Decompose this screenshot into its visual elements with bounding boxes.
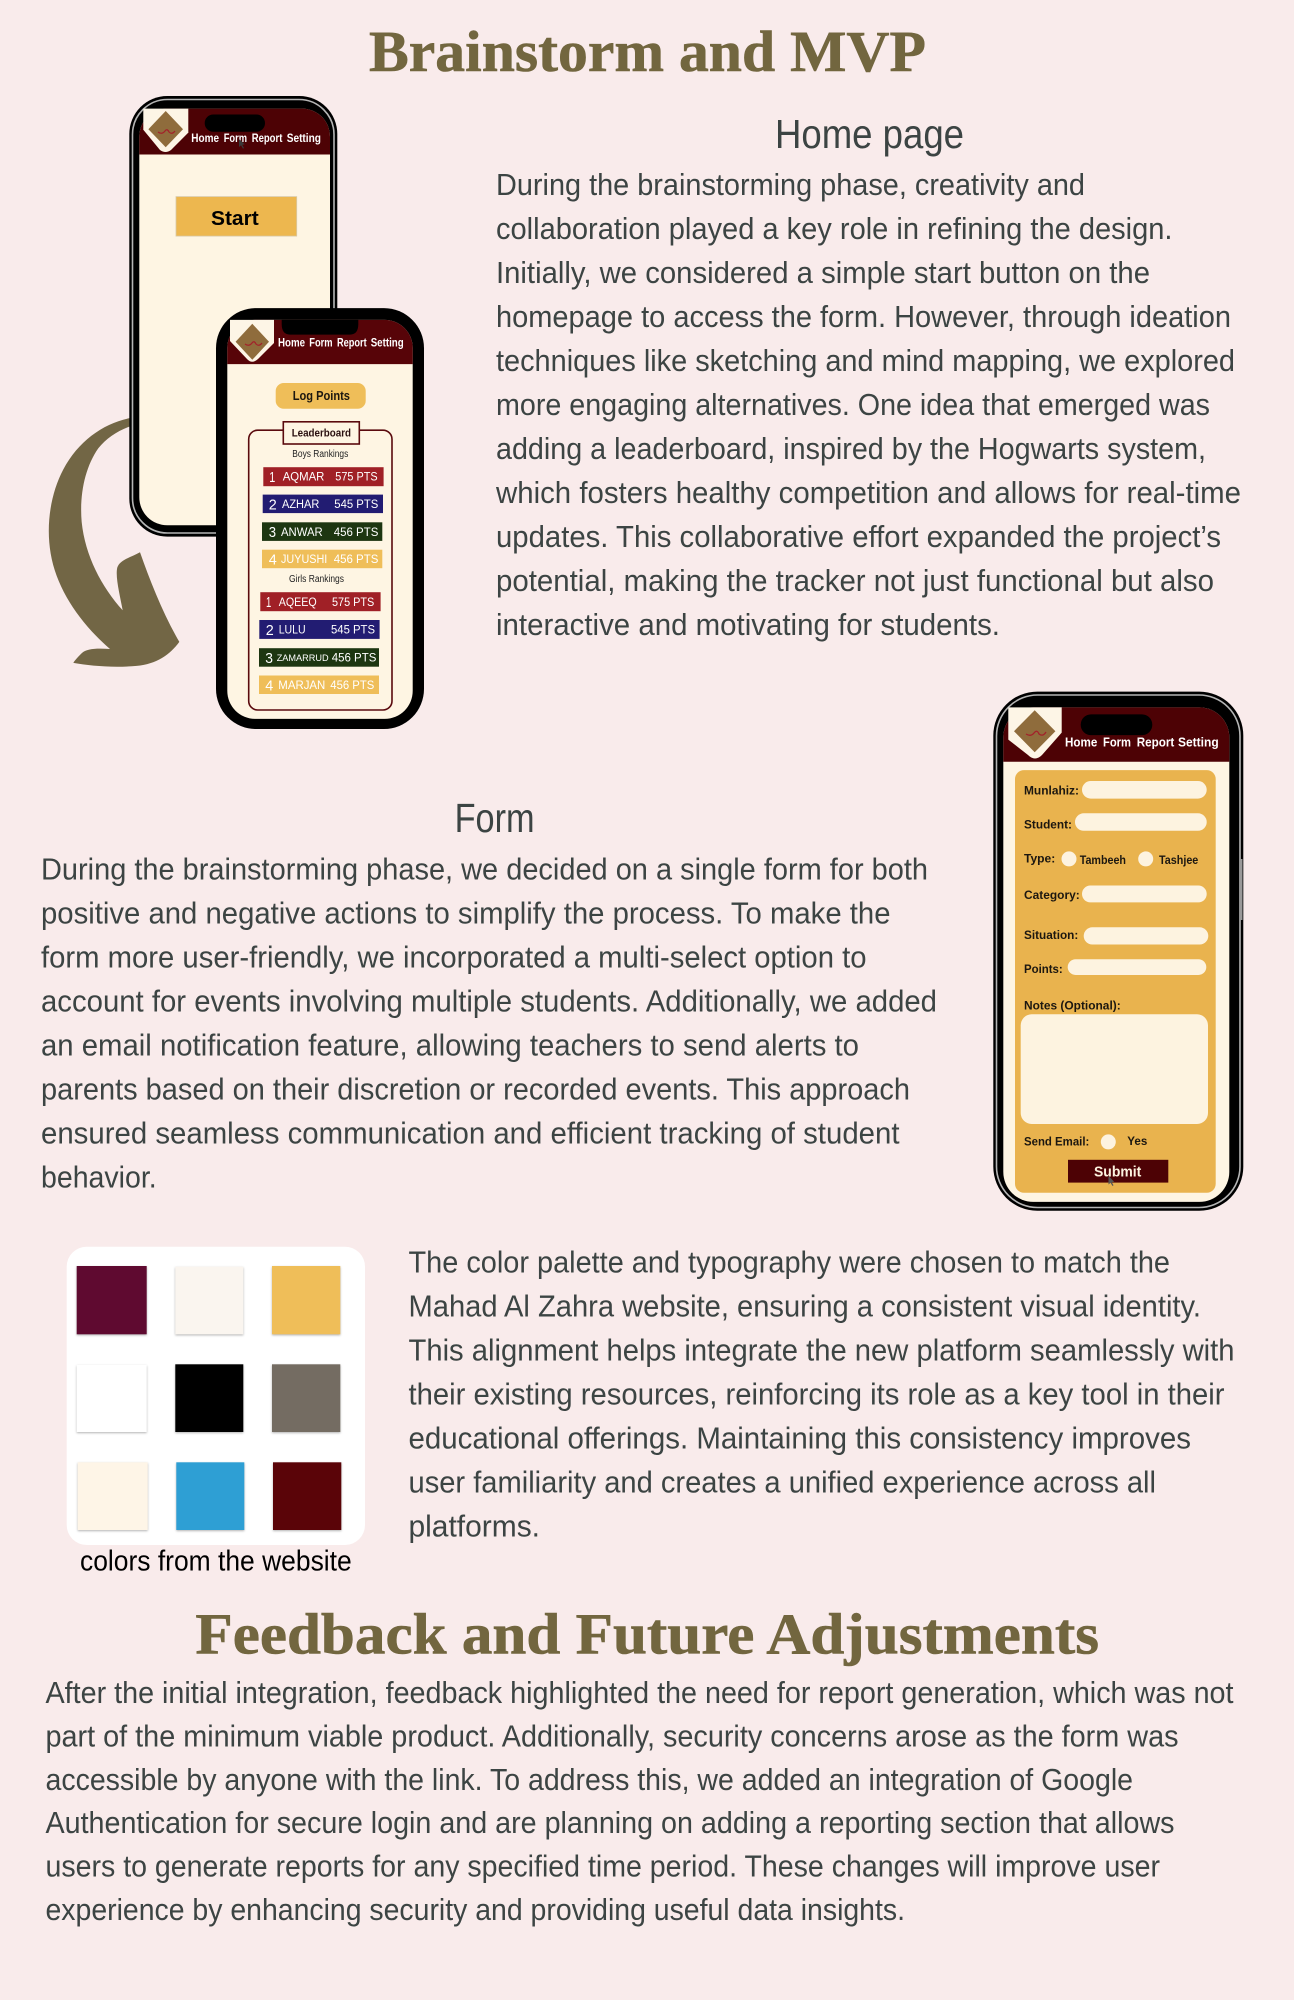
text block: palette description: platforms. [408,1508,540,1544]
girls rankings: 456 PTS [330,680,375,692]
boys rankings: 2 [269,496,277,513]
form labels: Category: [1024,888,1080,902]
girls rankings: 1 [266,594,271,611]
cursor [1108,1176,1114,1186]
notch [1081,714,1152,735]
navigation labels: Setting [1178,735,1219,750]
text block: form description: an email notification feature, allowing teachers to send alerts to [41,1028,859,1062]
navigation labels: Form [309,337,333,349]
text block: home page description [495,167,1241,642]
navigation labels: Setting [371,337,404,349]
navigation labels: Home [1065,735,1097,750]
color swatches [77,1266,341,1530]
phone header bar [1003,707,1229,762]
text block: feedback description: Authentication for secure login and are planning on adding a reporting section that allows [46,1805,1174,1840]
submit button [1068,1160,1168,1183]
boys rankings: 575 PTS [335,472,378,484]
logo [1008,707,1062,758]
form labels: Type: [1024,851,1055,865]
text block: home page description: During the brainstorming phase, creativity and [496,167,1085,202]
phone: home page with start button [129,96,337,537]
phone screen background [227,320,413,719]
boys rankings: 456 PTS [334,554,379,566]
girls rankings: AQEEQ [279,597,317,609]
phone screen background [1003,707,1229,1202]
boys rankings: 4 [269,551,277,568]
girls rankings: ZAMARRUD [277,653,329,664]
girls rankings: Girls Rankings [289,574,344,585]
text block: home page description: adding a leaderboard, inspired by the Hogwarts system, [496,431,1206,466]
form fields [1021,781,1208,1149]
title: Feedback and Future Adjustments: Feedback and Future Adjustments [195,1601,1099,1666]
girls rankings: 545 PTS [331,625,375,637]
boys rankings: AZHAR [282,499,319,511]
text block: feedback description: After the initial integration, feedback highlighted the need for report generation, which was not [46,1675,1234,1710]
girls rankings: 2 [266,622,274,639]
form labels: Tambeeh [1080,855,1126,867]
boys rankings: 545 PTS [334,499,379,511]
text block: form description [41,852,937,1194]
logo [143,109,188,152]
log points button: Log Points [293,388,350,403]
girls rankings: 456 PTS [332,653,377,665]
phone: form screen [993,692,1243,1211]
start button: Start [211,207,259,230]
navigation labels [191,133,321,145]
text block: form description: ensured seamless communication and efficient tracking of student [41,1116,900,1150]
caption: colors from the website: colors from the website [80,1546,352,1578]
notch [282,320,358,335]
text block: form description: positive and negative actions to simplify the process. To make the [41,896,890,930]
girls rankings: 4 [265,677,273,694]
form labels: Tashjee [1159,855,1198,867]
form labels: Send Email: [1024,1134,1089,1148]
form labels: Points: [1024,962,1063,976]
text block: palette description: Mahad Al Zahra website, ensuring a consistent visual identity. [408,1288,1201,1324]
phone header bar [139,109,330,154]
notch [205,114,265,132]
boys rankings: 456 PTS [334,527,379,539]
navigation labels: Setting [287,133,321,145]
text block: feedback description: users to generate reports for any specified time period. These changes will improve user [46,1849,1160,1884]
heading: Home page: Home page [775,111,964,157]
text block: palette description: educational offerings. Maintaining this consistency improves [408,1420,1191,1456]
navigation labels: Report [337,337,367,349]
panel: color palette [67,1247,365,1545]
cursor [239,139,245,149]
navigation labels: Report [1137,735,1175,750]
heading: Form: Form [455,795,535,841]
title: Brainstorm and MVP: Brainstorm and MVP [369,19,926,84]
boys rankings: JUYUSHI [281,554,327,566]
boys rankings: AQMAR [283,472,324,484]
navigation labels: Home [278,337,305,349]
leaderboard title: Leaderboard [292,428,351,440]
text block: home page description: potential, making the tracker not just functional but also [496,563,1214,598]
boys rankings: 3 [269,524,276,541]
text block: home page description: updates. This collaborative effort expanded the project’s [496,519,1221,554]
girls rankings [259,574,381,694]
navigation labels [278,337,404,349]
phone header bar [227,320,413,364]
arrow: curved arrow from home phone to leaderboard phone [49,417,179,667]
text block: feedback description: part of the minimum viable product. Additionally, security concerns arose as the form was [46,1718,1178,1753]
text block: feedback description: experience by enhancing security and providing useful data insights. [46,1892,905,1927]
text block: form description: behavior. [41,1160,157,1194]
leaderboard title [283,422,359,444]
leaderboard panel [249,422,392,710]
text block: home page description: Initially, we considered a simple start button on the [496,255,1150,290]
boys rankings [262,449,384,568]
navigation labels [1065,735,1219,750]
log points button [276,383,366,409]
text block: form description: parents based on their discretion or recorded events. This approach [41,1072,910,1106]
phone: home page with leaderboard [216,308,424,729]
text block: home page description: techniques like sketching and mind mapping, we explored [496,343,1235,378]
submit button: Submit [1094,1164,1141,1181]
navigation labels: Form [224,133,247,145]
text block: home page description: which fosters healthy competition and allows for real-time [495,475,1241,510]
form labels [1024,784,1198,1148]
text block: palette description: The color palette and typography were chosen to match the [408,1244,1170,1280]
text block: form description: During the brainstorming phase, we decided on a single form for both [41,852,928,886]
girls rankings: LULU [279,625,306,637]
text block: feedback description [46,1675,1234,1927]
boys rankings: Boys Rankings [292,449,348,460]
phone screen background [139,109,330,525]
form labels: Notes (Optional): [1024,999,1121,1013]
text block: form description: account for events involving multiple students. Additionally, we added [41,984,937,1018]
form labels: Yes [1127,1134,1148,1148]
start button [176,197,297,236]
text block: form description: form more user-friendly, we incorporated a multi-select option to [41,940,866,974]
navigation labels: Form [1103,735,1131,750]
girls rankings: 3 [265,650,273,667]
navigation labels: Report [252,133,283,145]
text block: palette description [408,1244,1234,1544]
text block: home page description: more engaging alternatives. One idea that emerged was [496,387,1210,422]
boys rankings: ANWAR [281,527,323,539]
logo [230,320,274,362]
form panel [1015,770,1216,1193]
form labels: Munlahiz: [1024,784,1079,798]
girls rankings: MARJAN [278,680,325,692]
text block: palette description: their existing resources, reinforcing its role as a key tool in their [408,1376,1224,1412]
text block: feedback description: accessible by anyone with the link. To address this, we added an integration of Google [46,1762,1133,1797]
text block: home page description: collaboration played a key role in refining the design. [496,211,1172,246]
form labels: Student: [1024,818,1072,832]
text block: palette description: user familiarity and creates a unified experience across all [408,1464,1156,1500]
girls rankings: 575 PTS [332,597,375,609]
text block: home page description: homepage to access the form. However, through ideation [496,299,1231,334]
navigation labels: Home [191,133,219,145]
boys rankings: 1 [269,469,275,486]
text block: palette description: This alignment helps integrate the new platform seamlessly with [408,1332,1234,1368]
text block: home page description: interactive and motivating for students. [496,607,1000,642]
form labels: Situation: [1024,928,1078,942]
